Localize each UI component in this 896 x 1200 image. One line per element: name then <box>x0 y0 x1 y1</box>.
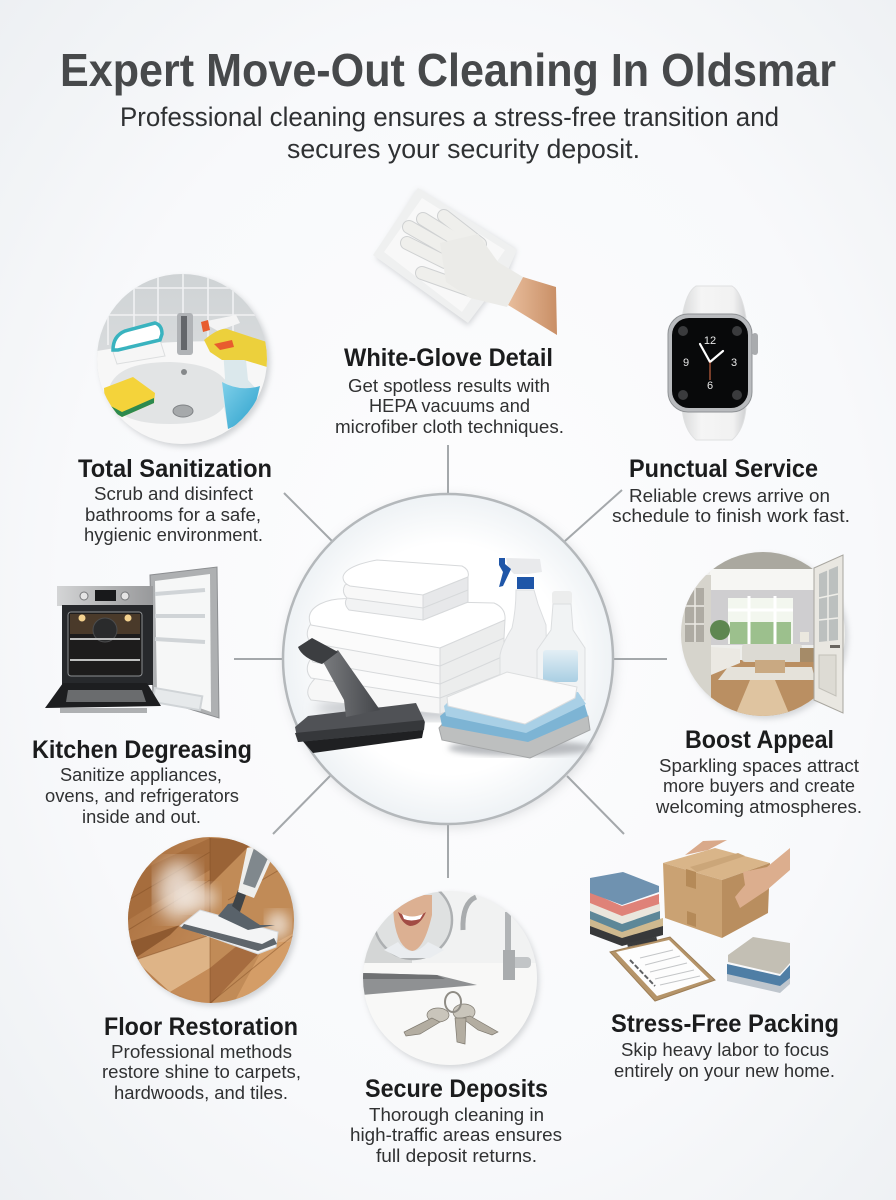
description: Sanitize appliances, <box>60 765 222 785</box>
description <box>335 376 564 437</box>
icon: spray bottle <box>499 558 547 690</box>
icon: bathroom sink circle <box>92 274 272 446</box>
icon: steam mop on wood floor <box>128 837 294 1003</box>
description: high-traffic areas ensures <box>350 1125 562 1145</box>
title: Expert Move-Out Cleaning In Oldsmar <box>60 44 836 96</box>
icon: stacked clothes <box>590 872 663 946</box>
description: microfiber cloth techniques. <box>335 417 564 437</box>
description: Scrub and disinfect <box>94 484 253 504</box>
panel: floor restoration <box>102 830 305 1103</box>
panel: secure deposits <box>350 881 562 1166</box>
icon: oven and open fridge <box>45 567 219 718</box>
description <box>45 765 239 827</box>
description: Skip heavy labor to focus <box>621 1040 829 1060</box>
description: Professional methods <box>111 1042 292 1062</box>
icon: smart watch: 3 <box>731 357 737 369</box>
icon: smart watch: 6 <box>707 380 713 392</box>
description: bathrooms for a safe, <box>85 505 261 525</box>
subtitle <box>120 102 779 164</box>
description: Get spotless results with <box>348 376 550 396</box>
heading: Stress-Free Packing <box>611 1010 839 1038</box>
description <box>84 484 263 545</box>
description <box>655 756 862 817</box>
description <box>350 1105 562 1166</box>
icon: keys on bathroom counter <box>362 881 538 1068</box>
icon: smart watch <box>668 286 758 440</box>
panel: stress-free packing <box>590 840 839 1081</box>
description: full deposit returns. <box>376 1146 537 1166</box>
icon: bright living room with open door <box>680 552 850 719</box>
heading: Kitchen Degreasing <box>32 736 252 764</box>
icon: cleaner bottle <box>537 591 585 700</box>
heading: Total Sanitization <box>78 455 272 483</box>
heading: Boost Appeal <box>685 726 834 754</box>
icon: smart watch: 9 <box>683 357 689 369</box>
description <box>612 486 850 526</box>
heading: Punctual Service <box>629 455 818 483</box>
description: hygienic environment. <box>84 525 263 545</box>
description: HEPA vacuums and <box>369 396 530 416</box>
description: schedule to finish work fast. <box>612 506 850 526</box>
description: Sparkling spaces attract <box>659 756 859 776</box>
panel: boost appeal <box>655 552 862 817</box>
description: Reliable crews arrive on <box>629 486 830 506</box>
icon: cardboard box <box>663 840 790 938</box>
panel: white-glove detail <box>335 188 564 437</box>
description <box>614 1040 835 1081</box>
panel: total sanitization <box>78 274 272 545</box>
icon: stacked white towels <box>307 560 525 720</box>
heading: White-Glove Detail <box>344 344 553 372</box>
description: welcoming atmospheres. <box>655 797 862 817</box>
heading: Secure Deposits <box>365 1075 548 1103</box>
panel: kitchen degreasing <box>32 567 252 827</box>
panel: punctual service <box>612 286 850 526</box>
icon: folded blue towels <box>439 672 592 758</box>
subtitle: Professional cleaning ensures a stress-free transition and <box>120 102 779 132</box>
icon: clipboard checklist <box>610 937 715 1001</box>
icon: clothes, box and clipboard <box>590 840 790 1001</box>
description: more buyers and create <box>663 776 855 796</box>
description: hardwoods, and tiles. <box>114 1083 288 1103</box>
description: ovens, and refrigerators <box>45 786 239 806</box>
description: restore shine to carpets, <box>102 1062 301 1082</box>
icon: folded shirts <box>727 937 790 993</box>
icon: vacuum nozzle <box>295 638 425 753</box>
icon: gloved hand on cloth <box>373 188 557 335</box>
heading: Floor Restoration <box>104 1013 298 1041</box>
description: Thorough cleaning in <box>369 1105 544 1125</box>
icon: smart watch: 12 <box>704 335 716 347</box>
description: entirely on your new home. <box>614 1061 835 1081</box>
description <box>102 1042 301 1103</box>
description: inside and out. <box>82 807 201 827</box>
subtitle: secures your security deposit. <box>287 134 640 164</box>
panel: central supplies circle <box>283 494 615 827</box>
